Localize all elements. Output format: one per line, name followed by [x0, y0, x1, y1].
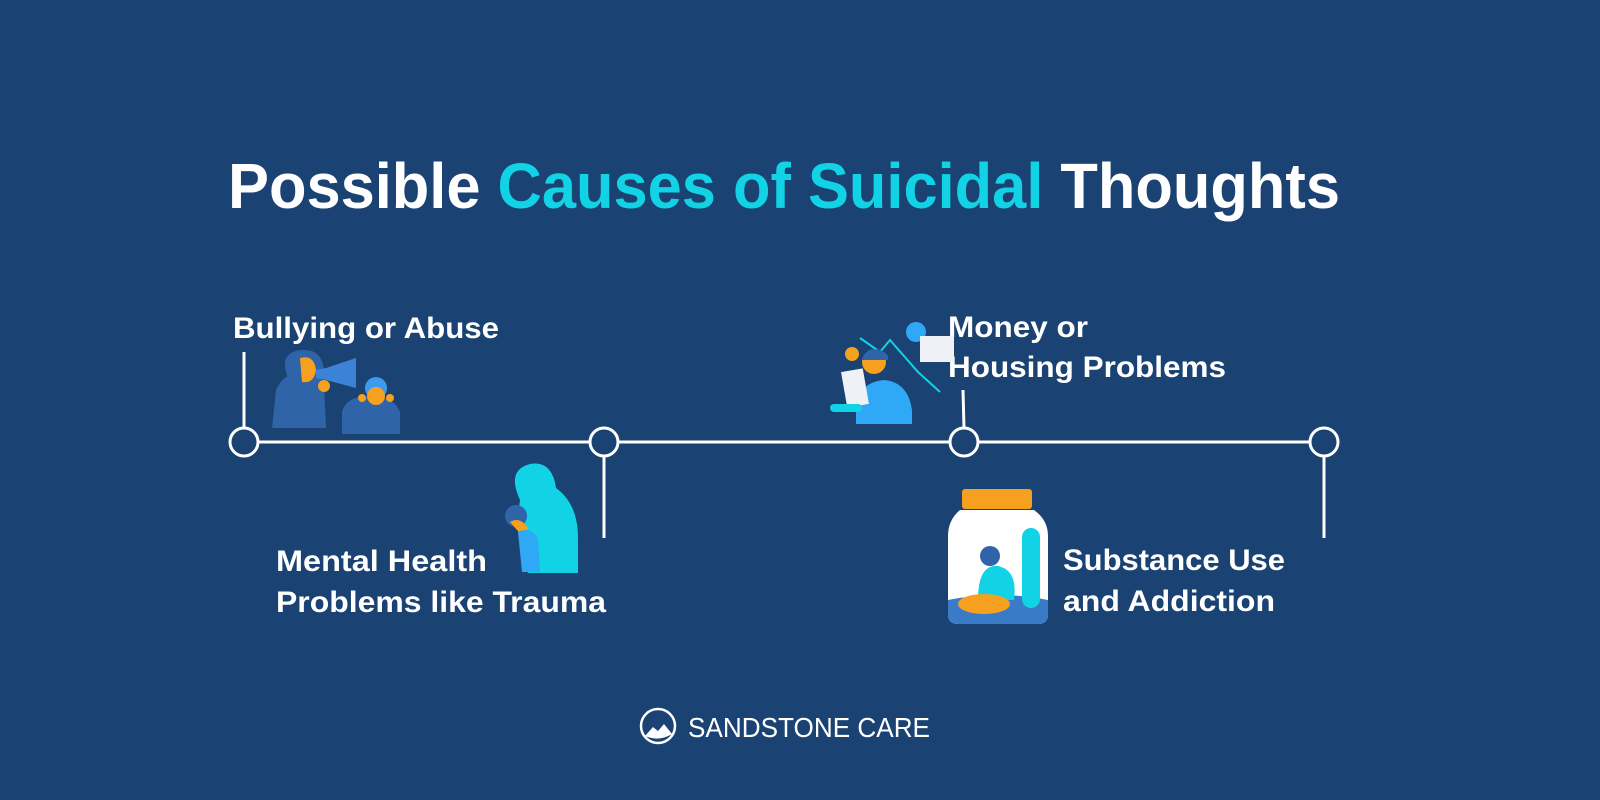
label: bullying: Bullying or Abuse	[233, 312, 499, 345]
logo: SANDSTONE CARE	[688, 712, 930, 743]
label: substance: Substance Use	[1063, 544, 1285, 577]
icon: hug illustration	[505, 464, 578, 573]
label: money: Money or	[948, 311, 1088, 344]
icon: money illustration	[830, 322, 954, 424]
label: housing: Housing Problems	[948, 351, 1226, 384]
label: trauma: Problems like Trauma	[276, 586, 606, 619]
title: Possible Causes of Suicidal Thoughts	[228, 150, 1340, 222]
icon: bullying illustration	[272, 350, 400, 434]
icon: pill jar	[948, 489, 1048, 624]
label: mental health: Mental Health	[276, 545, 487, 578]
label: addiction: and Addiction	[1063, 585, 1275, 618]
timeline	[230, 352, 1338, 538]
